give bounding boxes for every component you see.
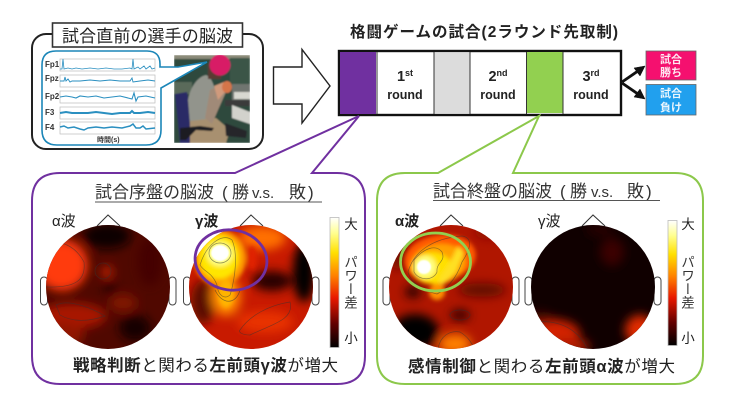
- label: alpha: α波: [52, 213, 76, 230]
- round 1: round: [387, 88, 423, 102]
- outcome: loss: [646, 84, 696, 115]
- heading: opening phase: ): [308, 183, 314, 202]
- heading: opening phase: [95, 183, 322, 202]
- colorbar: power difference: 大: [344, 217, 358, 232]
- caption: 戦略判断と関わる左前頭γ波が増大: [73, 355, 338, 375]
- arrow: leads to match: [274, 50, 330, 123]
- callout: EEG traces: 時間(s): [97, 135, 120, 144]
- outcome: loss: 負け: [660, 100, 682, 114]
- callout: EEG traces: [42, 51, 207, 145]
- segment: interval: [434, 53, 470, 113]
- heading: opening phase: 勝: [232, 183, 249, 202]
- colorbar: power difference: 小: [681, 331, 695, 346]
- outcome: win: 試合: [660, 52, 682, 66]
- panel: opening phase EEG: [32, 116, 365, 384]
- round 3: rd: [591, 68, 600, 78]
- segment: opening phase: [340, 52, 376, 114]
- outcome: win: [646, 51, 696, 80]
- panel: pre-match EEG: [32, 23, 263, 149]
- topomap: gamma closing: [524, 215, 661, 354]
- heading: opening phase: (: [222, 183, 228, 202]
- highlight ring: left frontal gamma: [191, 225, 271, 295]
- heading: closing phase: [433, 182, 660, 201]
- caption: 感情制御と関わる左前頭α波が増大: [408, 356, 675, 376]
- heading: closing phase: ): [646, 182, 652, 201]
- panel: closing phase EEG: [377, 116, 703, 384]
- heading: opening phase: 敗: [289, 183, 306, 202]
- colorbar: power difference: パワー差: [678, 255, 698, 310]
- heading: fighting game match: 格闘ゲームの試合(2ラウンド先取制): [350, 22, 618, 41]
- callout: EEG traces: Fpz: [45, 74, 59, 83]
- colorbar: power difference: [668, 217, 698, 346]
- heading: closing phase: 敗: [627, 182, 644, 201]
- arrows: to outcomes: [622, 66, 645, 99]
- topomap: alpha opening: [36, 215, 176, 349]
- heading: opening phase: 試合序盤の脳波: [95, 183, 214, 202]
- outcome: win: 勝ち: [660, 65, 682, 79]
- topomap: alpha closing: [383, 215, 519, 354]
- label: gamma: γ波: [538, 213, 561, 230]
- image: player wearing EEG cap at game console: [174, 54, 250, 143]
- heading: closing phase: (: [560, 182, 566, 201]
- heading: closing phase: 勝: [570, 182, 587, 201]
- callout: EEG traces: Fp1: [45, 60, 60, 69]
- colorbar: power difference: 大: [681, 217, 695, 232]
- colorbar: power difference: パワー差: [341, 255, 361, 310]
- heading: closing phase: 試合終盤の脳波: [433, 182, 552, 201]
- round 3: [564, 53, 620, 113]
- label: gamma: γ波: [195, 212, 218, 230]
- heading: pre-match EEG: 試合直前の選手の脳波: [62, 27, 233, 46]
- round 3: round: [573, 88, 609, 102]
- timeline: match rounds: [339, 51, 621, 115]
- topomap: gamma opening: [184, 215, 319, 349]
- callout: EEG traces: F3: [45, 108, 55, 117]
- round 1: [378, 53, 434, 113]
- round 2: [471, 53, 526, 113]
- round 1: 1: [397, 69, 405, 85]
- callout: EEG traces: F4: [45, 123, 55, 132]
- colorbar: power difference: 小: [344, 331, 358, 346]
- outcome: loss: 試合: [660, 86, 682, 100]
- heading: opening phase: v.s.: [252, 185, 274, 202]
- colorbar: power difference: [330, 217, 361, 348]
- callout: EEG traces: Fp2: [45, 92, 60, 101]
- round 2: 2: [488, 69, 497, 85]
- label: alpha: α波: [395, 212, 419, 230]
- round 3: 3: [582, 69, 591, 85]
- round 2: round: [480, 88, 516, 102]
- highlight ring: left frontal alpha: [400, 233, 470, 291]
- heading: closing phase: v.s.: [591, 184, 613, 201]
- round 1: st: [405, 68, 413, 78]
- segment: closing phase: [527, 52, 562, 113]
- round 2: nd: [497, 68, 508, 78]
